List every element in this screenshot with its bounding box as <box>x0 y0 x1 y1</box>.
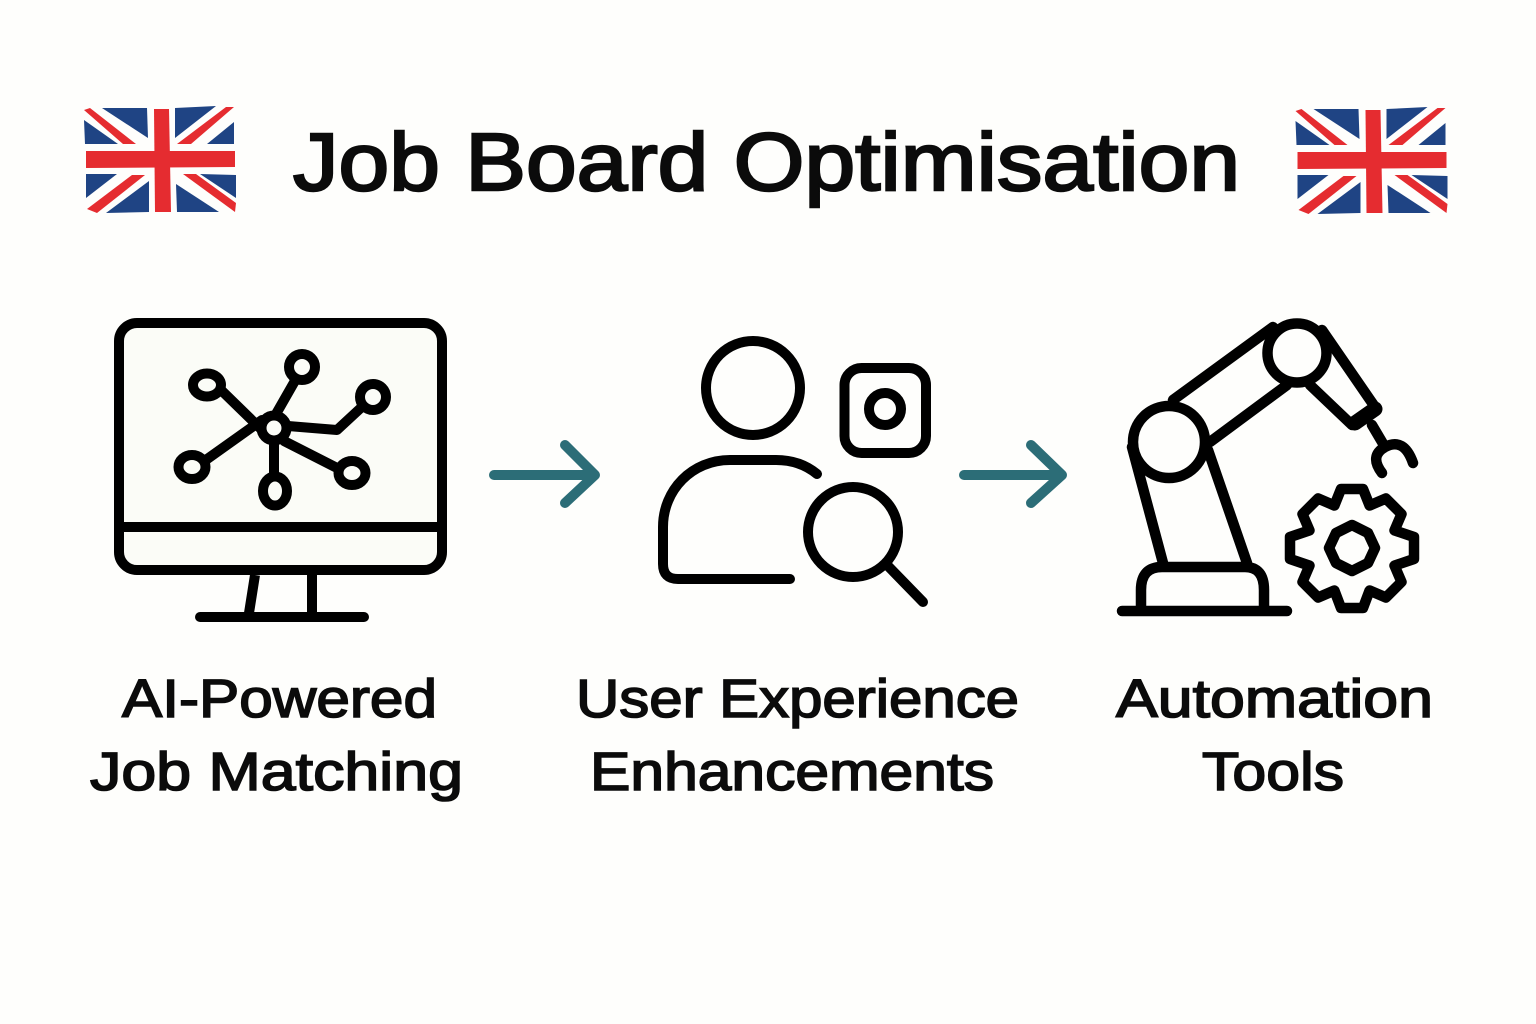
gripper <box>1355 409 1375 423</box>
label: User Experience Enhancements <box>576 669 1019 802</box>
arrow: second step to third <box>964 445 1062 503</box>
icon: user with magnifying glass <box>663 341 926 602</box>
gear <box>1290 489 1414 608</box>
icon: left UK flag <box>84 106 236 213</box>
label: AI-Powered Job Matching <box>90 669 463 802</box>
monitor stand <box>119 527 442 613</box>
label: User Experience Enhancements: Enhancements <box>590 742 994 802</box>
label: AI-Powered Job Matching: AI-Powered <box>122 669 437 729</box>
person body <box>663 460 817 579</box>
robot base <box>1122 567 1287 611</box>
profile photo square <box>844 368 926 453</box>
person head <box>706 341 800 435</box>
arrow: first step to second <box>494 445 595 503</box>
monitor base <box>200 612 364 622</box>
icon: right UK flag <box>1296 107 1448 214</box>
network nodes <box>178 354 386 506</box>
label: AI-Powered Job Matching: Job Matching <box>90 742 463 802</box>
label: Automation Tools: Automation <box>1116 669 1433 729</box>
label: User Experience Enhancements: User Experience <box>576 669 1019 729</box>
robot arm <box>1132 327 1375 563</box>
magnifying glass <box>888 566 923 602</box>
icon: robot arm with gear <box>1122 324 1414 611</box>
icon: computer monitor with AI network <box>119 323 442 617</box>
label: Automation Tools: Tools <box>1202 742 1344 802</box>
monitor screen <box>119 323 442 570</box>
network links <box>203 379 364 476</box>
label: Automation Tools <box>1116 669 1433 802</box>
title: Job Board Optimisation <box>293 117 1240 208</box>
